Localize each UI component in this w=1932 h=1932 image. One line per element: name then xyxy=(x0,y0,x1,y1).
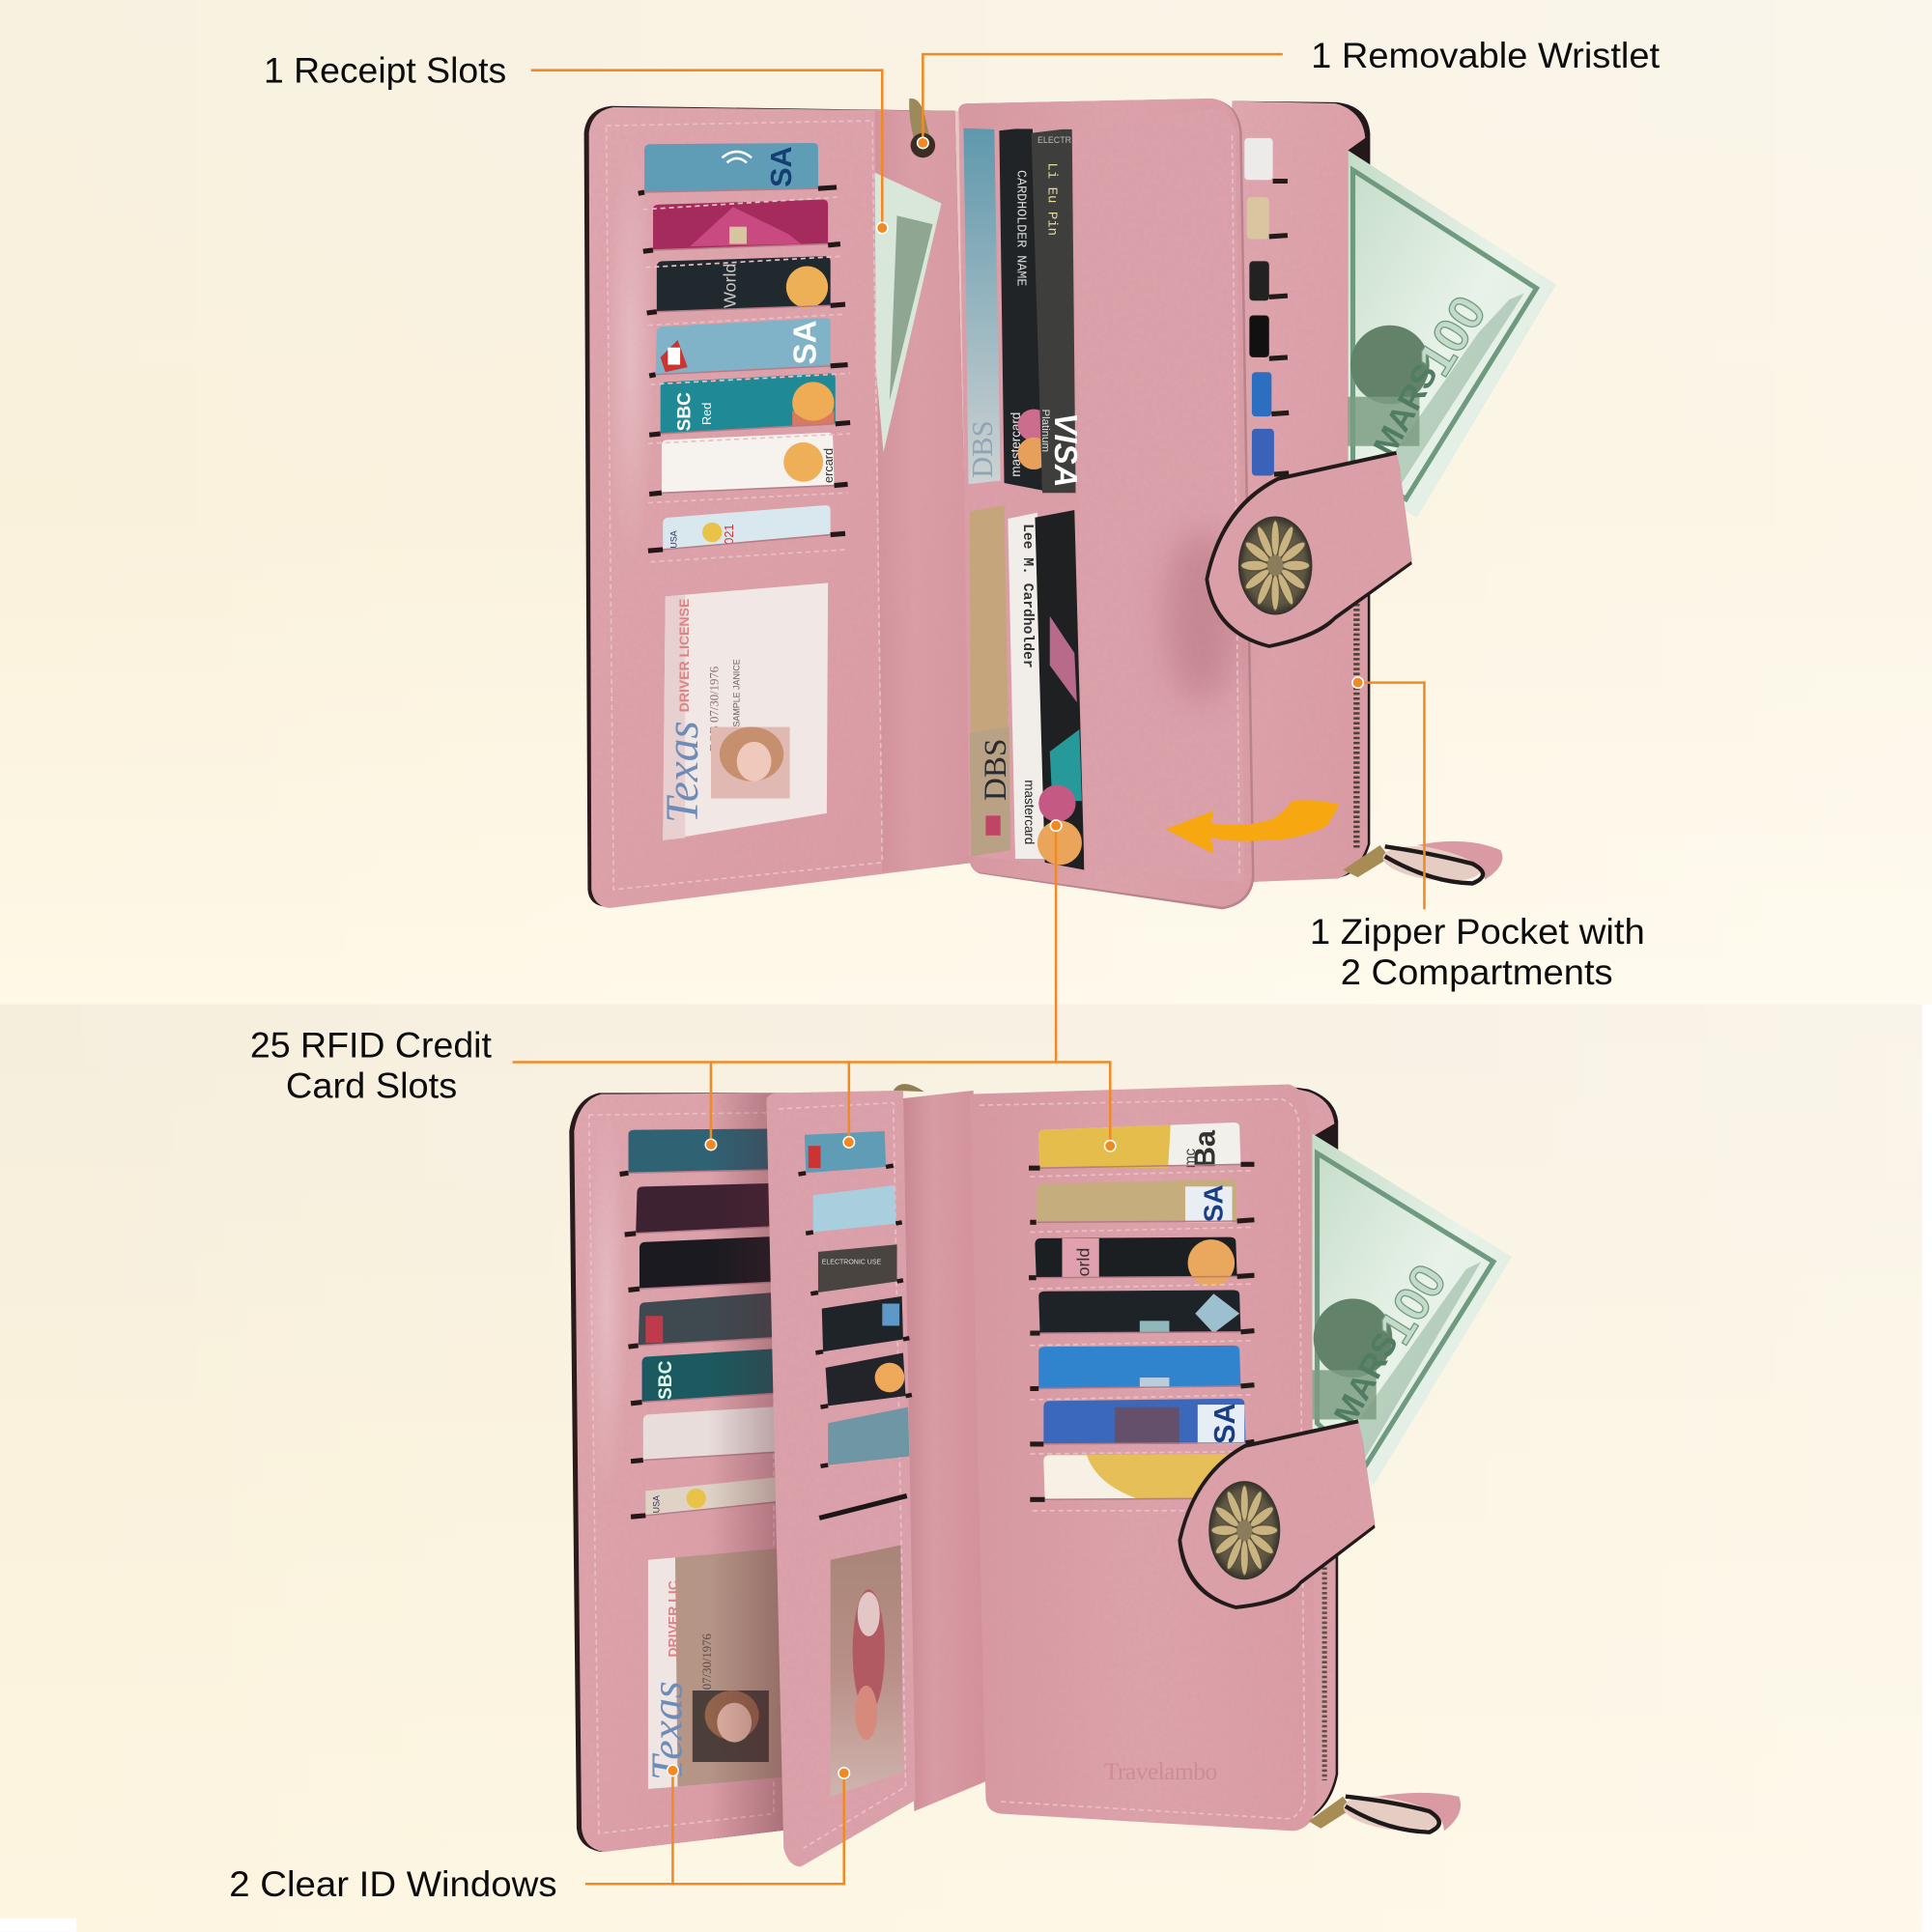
card 5: SBC xyxy=(674,392,695,431)
lower tan card: DBS xyxy=(978,739,1013,801)
zipper pocket back panel xyxy=(1233,101,1370,882)
zipper teeth xyxy=(1322,1528,1326,1780)
flap card 3: ELECTRONIC USE xyxy=(822,1260,882,1266)
banknote behind zipper pocket: 100 xyxy=(1367,1255,1458,1353)
back pocket cards peeking xyxy=(1244,138,1289,475)
left card slots xyxy=(639,143,850,562)
right panel stitching xyxy=(980,1099,1305,1819)
callout: zipper leader xyxy=(1352,677,1424,909)
ID window: DRIVER LIC xyxy=(666,1580,681,1658)
card 1 xyxy=(1038,1122,1240,1168)
ID window: Texas xyxy=(641,1681,691,1780)
upper black card: CARDHOLDER NAME xyxy=(1013,170,1028,286)
flap card 1 xyxy=(805,1131,886,1173)
lower white card: mastercard xyxy=(1022,780,1037,844)
fold-out flap xyxy=(766,1091,916,1866)
label: clear ID windows: 2 Clear ID Windows xyxy=(229,1864,557,1904)
strap stitching xyxy=(1233,135,1239,877)
upper VISA card: Li Eu Pin xyxy=(1043,162,1059,236)
label: receipt slots: 1 Receipt Slots xyxy=(264,50,506,90)
stitching under slots xyxy=(1030,1171,1254,1511)
card 6 xyxy=(1043,1399,1246,1444)
label: removable wristlet: 1 Removable Wristlet xyxy=(1311,36,1660,75)
swap arrow xyxy=(1166,800,1339,854)
wrist strap clip xyxy=(909,99,935,157)
card 7: USA xyxy=(668,530,678,549)
stitching under slots xyxy=(643,197,850,562)
flap slot ends xyxy=(799,1166,912,1466)
card 4: SA xyxy=(787,320,823,365)
lower black teal card xyxy=(1035,510,1084,870)
right panel xyxy=(970,1084,1316,1831)
card 5 xyxy=(641,1349,773,1402)
snap button xyxy=(1238,516,1312,614)
upper black card xyxy=(999,127,1050,491)
upper VISA card: Platinum xyxy=(1039,409,1051,452)
card 4 xyxy=(638,1293,772,1346)
gutter xyxy=(897,1091,988,1811)
ID window xyxy=(641,1548,788,1789)
central backing xyxy=(958,103,1091,877)
upper VISA card: ELECTR xyxy=(1037,135,1072,145)
card 7: USA xyxy=(651,1495,661,1513)
card 3: World xyxy=(720,264,739,308)
wrist strap clip peek xyxy=(894,1084,924,1092)
clasp tab xyxy=(1205,451,1412,648)
card 6 xyxy=(662,433,836,493)
callout: receipt slots leader xyxy=(531,71,888,234)
flap card 6 xyxy=(828,1407,909,1465)
flap card 2 xyxy=(813,1185,895,1233)
upper blue card xyxy=(963,128,1001,484)
banknote behind zipper pocket: MARS xyxy=(1367,358,1445,462)
card 1 xyxy=(628,1128,768,1173)
clear ID window, left panel: DOB 07/30/1976 xyxy=(708,667,722,752)
card 6: ercard xyxy=(821,448,836,483)
banknote behind zipper pocket xyxy=(1348,151,1556,518)
card 3: orld xyxy=(1074,1248,1094,1276)
right panel cards xyxy=(1029,1122,1254,1511)
flap card 5 xyxy=(826,1353,906,1406)
slot ends xyxy=(1029,1164,1254,1499)
zipper pull, bottom wallet xyxy=(1309,1791,1461,1836)
card 6: SA xyxy=(1208,1403,1241,1444)
upper VISA card: VISA xyxy=(1047,412,1083,488)
clear ID window, left panel xyxy=(658,582,828,840)
slot ends xyxy=(620,1173,645,1517)
card 2 xyxy=(653,200,828,250)
banknote behind zipper pocket xyxy=(1312,1133,1512,1485)
zipper teeth xyxy=(1354,604,1359,850)
bottom wallet photo xyxy=(569,1084,1512,1866)
card 5 xyxy=(1038,1346,1240,1389)
card 5: Red xyxy=(699,403,714,425)
label: zipper pocket: 1 Zipper Pocket with xyxy=(1310,912,1645,952)
clear ID window, left panel: DRIVER LICENSE xyxy=(676,599,692,712)
callout: card slots leader xyxy=(513,820,1116,1151)
flap clear window xyxy=(831,1545,903,1797)
flap slit xyxy=(819,1495,907,1518)
card 3 xyxy=(639,1236,771,1289)
clasp tab xyxy=(1178,1419,1375,1609)
lower white card xyxy=(1008,513,1045,859)
stitching, left panel xyxy=(589,1113,774,1833)
upper black card: mastercard xyxy=(1009,412,1023,477)
card 2 xyxy=(636,1183,769,1234)
card 5: SBC xyxy=(656,1360,676,1400)
clear ID window, left panel: Texas xyxy=(658,721,708,823)
card 7 xyxy=(663,505,831,550)
card 1: Ba xyxy=(1189,1129,1222,1168)
upper VISA card xyxy=(1032,128,1083,493)
label: credit card slots: 25 RFID Credit xyxy=(250,1025,492,1065)
ID window: DOB 07/30/1976 xyxy=(700,1634,714,1719)
card 6 xyxy=(643,1406,775,1460)
card 2 xyxy=(1037,1179,1237,1222)
banknote behind zipper pocket: MARS xyxy=(1327,1326,1406,1431)
card 1: mc xyxy=(1182,1148,1199,1168)
left card slots xyxy=(620,1093,788,1857)
card 1: SA xyxy=(765,146,798,187)
slot edges xyxy=(644,188,836,550)
callout: ID windows leader xyxy=(585,1765,849,1884)
banknote behind zipper pocket: 100 xyxy=(1406,286,1496,385)
card 1 xyxy=(644,143,818,192)
zipper pocket back panel xyxy=(1282,1086,1338,1824)
flap card 4 xyxy=(822,1296,903,1351)
clear ID window, left panel: SAMPLE JANICE xyxy=(731,659,741,727)
callout: wristlet leader xyxy=(918,54,1283,149)
card 5 xyxy=(661,373,836,434)
card 3 xyxy=(1035,1237,1237,1287)
card 2: SA xyxy=(1198,1184,1228,1222)
top wallet photo xyxy=(584,99,1556,909)
snap button xyxy=(1208,1481,1280,1579)
left open panel xyxy=(584,106,974,908)
lower white card: Lee M. Cardholder xyxy=(1019,524,1035,668)
label: credit card slots: Card Slots xyxy=(286,1065,457,1105)
flap shadow xyxy=(718,1094,783,1837)
card 7 xyxy=(1043,1454,1233,1499)
zipper pull, top wallet xyxy=(1343,841,1502,887)
lower tan card xyxy=(970,505,1013,856)
card 7 xyxy=(645,1478,776,1515)
front strap panel xyxy=(958,99,1254,909)
card 4 xyxy=(656,318,831,375)
upper blue card: DBS xyxy=(966,420,999,478)
card 3 xyxy=(657,256,831,312)
receipt bill, left fold xyxy=(875,173,941,452)
card 7: 021 xyxy=(722,524,736,545)
central cards, top wallet xyxy=(963,127,1084,870)
flap card 3 xyxy=(818,1244,897,1293)
left open panel xyxy=(569,1093,788,1852)
stitching, left panel xyxy=(607,121,882,890)
brand emboss: Travelambo xyxy=(1104,1757,1217,1785)
card 4 xyxy=(1038,1290,1240,1333)
label: zipper pocket: 2 Compartments xyxy=(1341,952,1613,992)
